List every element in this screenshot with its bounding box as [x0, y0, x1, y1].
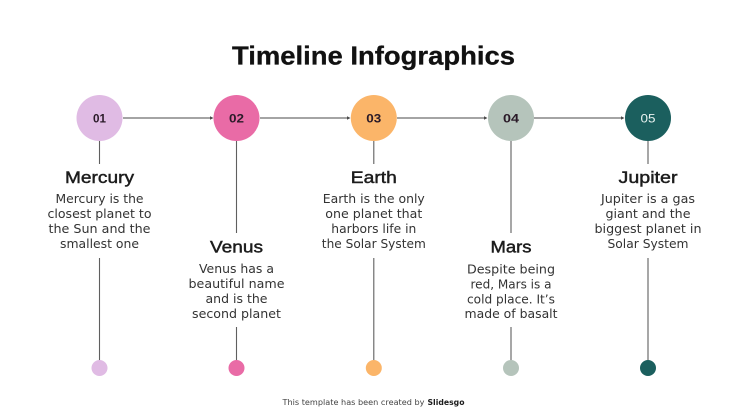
text: Earth description: harbors life in: [331, 222, 416, 236]
number badge 04: [488, 95, 534, 141]
arrow: 03 to 04: [397, 116, 488, 120]
text: Jupiter description: Jupiter is a gas: [600, 192, 695, 206]
text: Mars description: red, Mars is a: [470, 278, 552, 292]
end dot 04: [503, 360, 519, 376]
text: Mars description: [464, 262, 558, 321]
number badge 03: 03: [366, 112, 382, 126]
end dot 03: [366, 360, 382, 376]
text: Jupiter description: [594, 192, 702, 251]
end dot 01: [92, 360, 108, 376]
panel: step 05 Jupiter: [594, 95, 702, 376]
number badge 01: [76, 95, 122, 141]
text: Venus description: Venus has a: [199, 262, 274, 276]
heading: Mercury: Mercury: [65, 169, 135, 187]
text: Mercury description: smallest one: [60, 237, 139, 251]
text: Mercury description: Mercury is the: [56, 192, 144, 206]
arrow: 04 to 05: [534, 116, 624, 120]
panel: step 03 Earth: [322, 95, 426, 376]
text: Mars description: cold place. It’s: [467, 292, 555, 306]
text: Jupiter description: biggest planet in: [594, 222, 702, 236]
text: Earth description: one planet that: [325, 207, 423, 221]
text: Mars description: Despite being: [467, 262, 555, 276]
heading: Mars: Mars: [490, 238, 532, 256]
number badge 04: 04: [503, 112, 519, 126]
number badge 02: [214, 95, 260, 141]
text: Venus description: second planet: [192, 307, 281, 321]
text: Earth description: the Solar System: [322, 237, 426, 251]
arrow: 02 to 03: [260, 116, 350, 120]
text: Jupiter description: Solar System: [608, 237, 688, 251]
text: Earth description: [322, 192, 426, 251]
text: Venus description: beautiful name: [188, 277, 284, 291]
title: Timeline Infographics: [232, 40, 515, 70]
number badge 05: 05: [640, 112, 656, 126]
arrow: 01 to 02: [123, 116, 214, 120]
number badge 01: 01: [93, 112, 106, 126]
end dot 02: [228, 360, 244, 376]
text: Mercury description: the Sun and the: [48, 222, 150, 236]
number badge 03: [351, 95, 397, 141]
heading: Jupiter: Jupiter: [618, 169, 678, 187]
text: Venus description: and is the: [206, 292, 268, 306]
panel: step 02 Venus: [188, 95, 284, 376]
text: Venus description: [188, 262, 284, 321]
end dot 05: [640, 360, 656, 376]
text: Mercury description: [48, 192, 152, 251]
panel: step 01 Mercury: [48, 95, 152, 376]
text: Mercury description: closest planet to: [48, 207, 152, 221]
footer credit: Slidesgo: [428, 398, 465, 407]
footer credit: This template has been created by: [281, 398, 425, 407]
text: Earth description: Earth is the only: [323, 192, 425, 206]
number badge 02: 02: [229, 112, 244, 126]
panel: step 04 Mars: [464, 95, 558, 376]
text: Jupiter description: giant and the: [606, 207, 690, 221]
number badge 05: [625, 95, 671, 141]
heading: Venus: Venus: [210, 238, 263, 256]
text: Mars description: made of basalt: [464, 307, 558, 321]
heading: Earth: Earth: [351, 169, 397, 187]
